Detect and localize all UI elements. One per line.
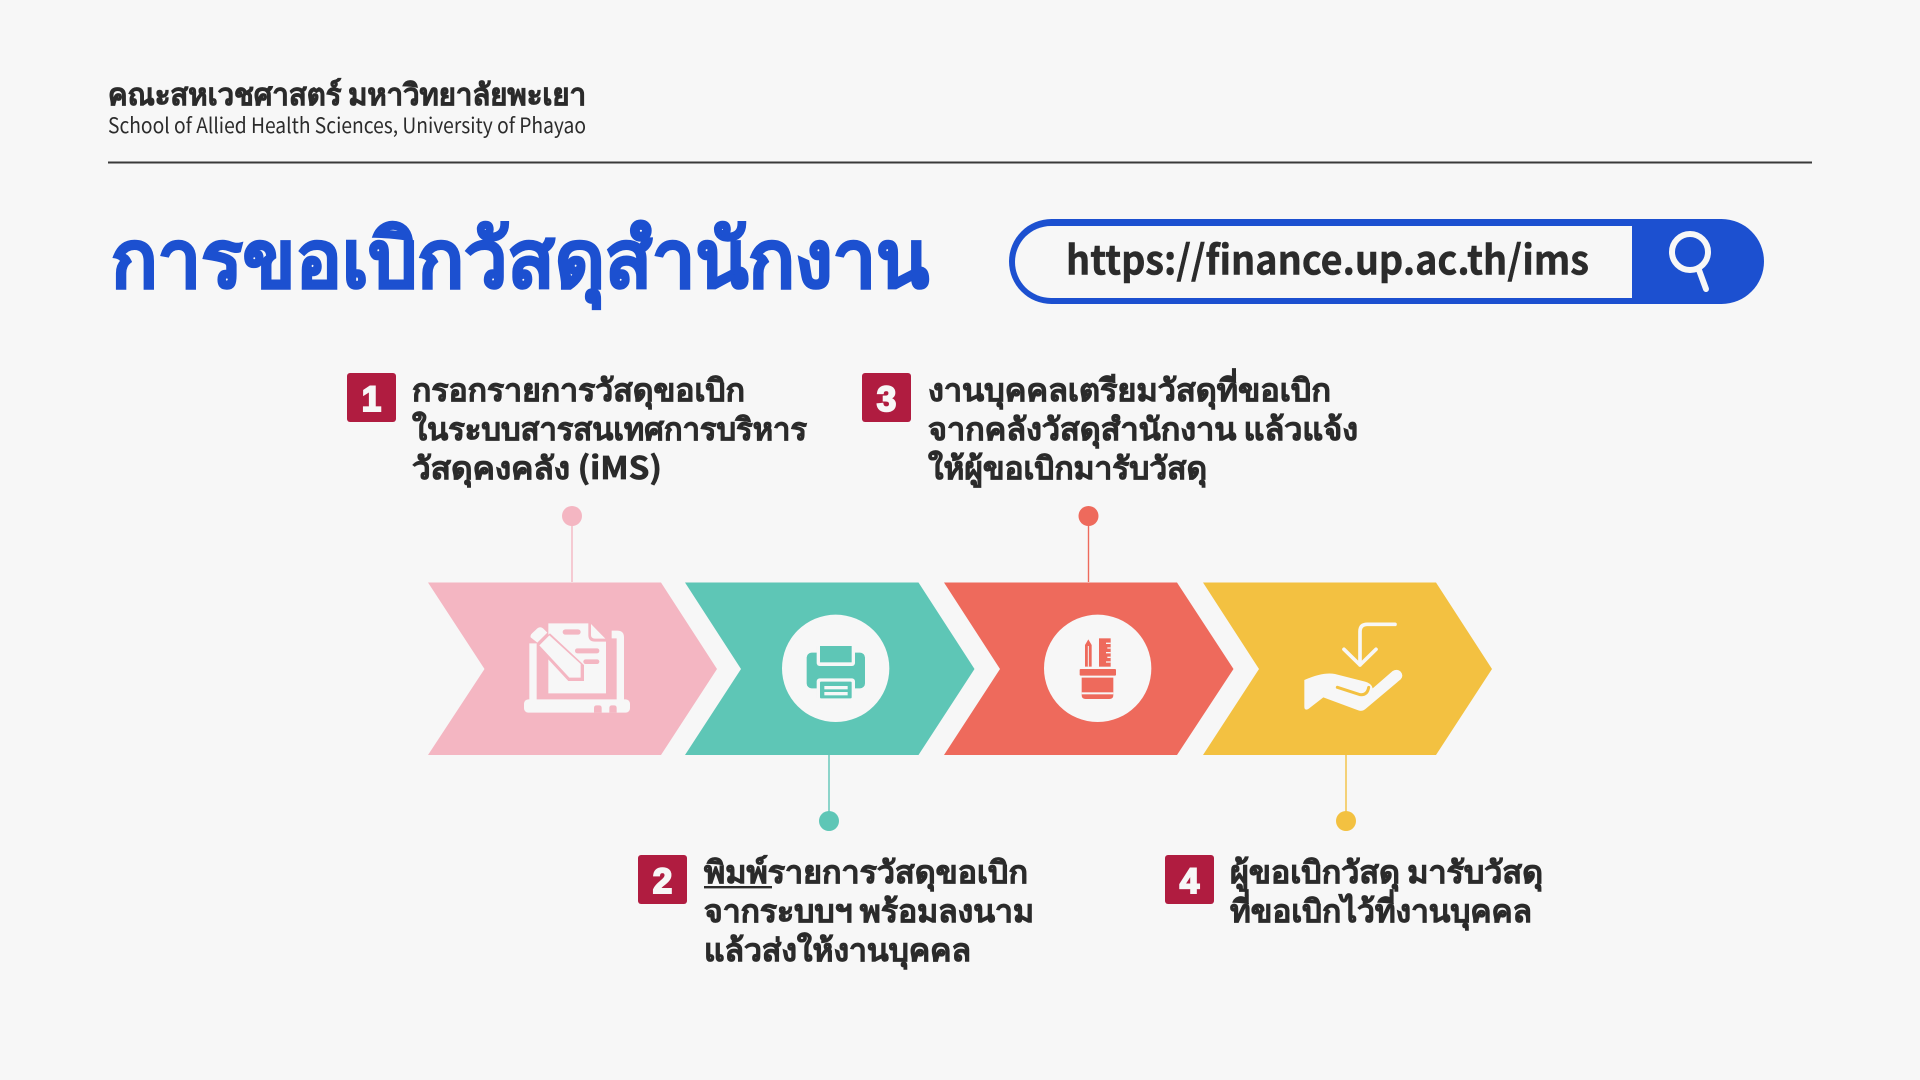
chevron: step 2 bbox=[685, 582, 974, 755]
header: faculty name: คณะสหเวชศาสตร์ มหาวิทยาลัยพะเยา bbox=[108, 70, 586, 114]
connector: step 3 bbox=[1078, 506, 1098, 582]
icon: pencil cup in circle bbox=[1044, 615, 1151, 722]
step 2 text: แล้วส่งให้งานบุคคล bbox=[704, 925, 971, 970]
step 3 text: 3 bbox=[877, 380, 896, 419]
search bar with URL bbox=[1009, 219, 1764, 304]
icon: hand receiving item bbox=[1304, 624, 1402, 711]
chevron: step 1 bbox=[428, 582, 717, 755]
step 2 text: 2 bbox=[653, 862, 672, 901]
connector: step 1 bbox=[562, 506, 582, 582]
connector: step 4 bbox=[1336, 755, 1356, 831]
icon: printer in circle bbox=[782, 615, 889, 722]
step 1 text bbox=[347, 365, 807, 488]
chevron: step 3 bbox=[944, 582, 1234, 755]
header: faculty name bbox=[108, 70, 586, 140]
step 4 text: ผู้ขอเบิกวัสดุ มารับวัสดุ bbox=[1230, 847, 1543, 892]
title: การขอเบิกวัสดุสำนักงาน bbox=[111, 195, 929, 311]
connector: step 2 bbox=[819, 755, 839, 831]
step 4 text bbox=[1165, 847, 1543, 931]
step 3 text: งานบุคคลเตรียมวัสดุที่ขอเบิก bbox=[928, 365, 1331, 410]
step 2 text: จากระบบฯ พร้อมลงนาม bbox=[704, 886, 1034, 931]
step 1 text: 1 bbox=[362, 380, 381, 419]
icon: magnifier bbox=[1672, 234, 1708, 289]
step 3 text bbox=[862, 365, 1358, 488]
step 1 text: กรอกรายการวัสดุขอเบิก bbox=[412, 365, 745, 410]
step 3 text: ให้ผู้ขอเบิกมารับวัสดุ bbox=[928, 443, 1207, 488]
chevron: step 4 bbox=[1203, 582, 1492, 755]
step 2 text bbox=[638, 847, 1034, 970]
search bar with URL: https://finance.up.ac.th/ims bbox=[1066, 228, 1589, 286]
step 2 text: พิมพ์รายการวัสดุขอเบิก bbox=[704, 847, 1028, 892]
icon: laptop with document and pencil bbox=[524, 623, 630, 713]
step 4 text: 4 bbox=[1180, 862, 1200, 901]
step 4 text: ที่ขอเบิกไว้ที่งานบุคคล bbox=[1230, 886, 1532, 931]
header: faculty name: School of Allied Health Sciences, University of Phayao bbox=[108, 110, 586, 140]
step 3 text: จากคลังวัสดุสำนักงาน แล้วแจ้ง bbox=[928, 404, 1358, 449]
step 1 text: ในระบบสารสนเทศการบริหาร bbox=[412, 404, 807, 449]
step 1 text: วัสดุคงคลัง (iMS) bbox=[412, 443, 662, 488]
